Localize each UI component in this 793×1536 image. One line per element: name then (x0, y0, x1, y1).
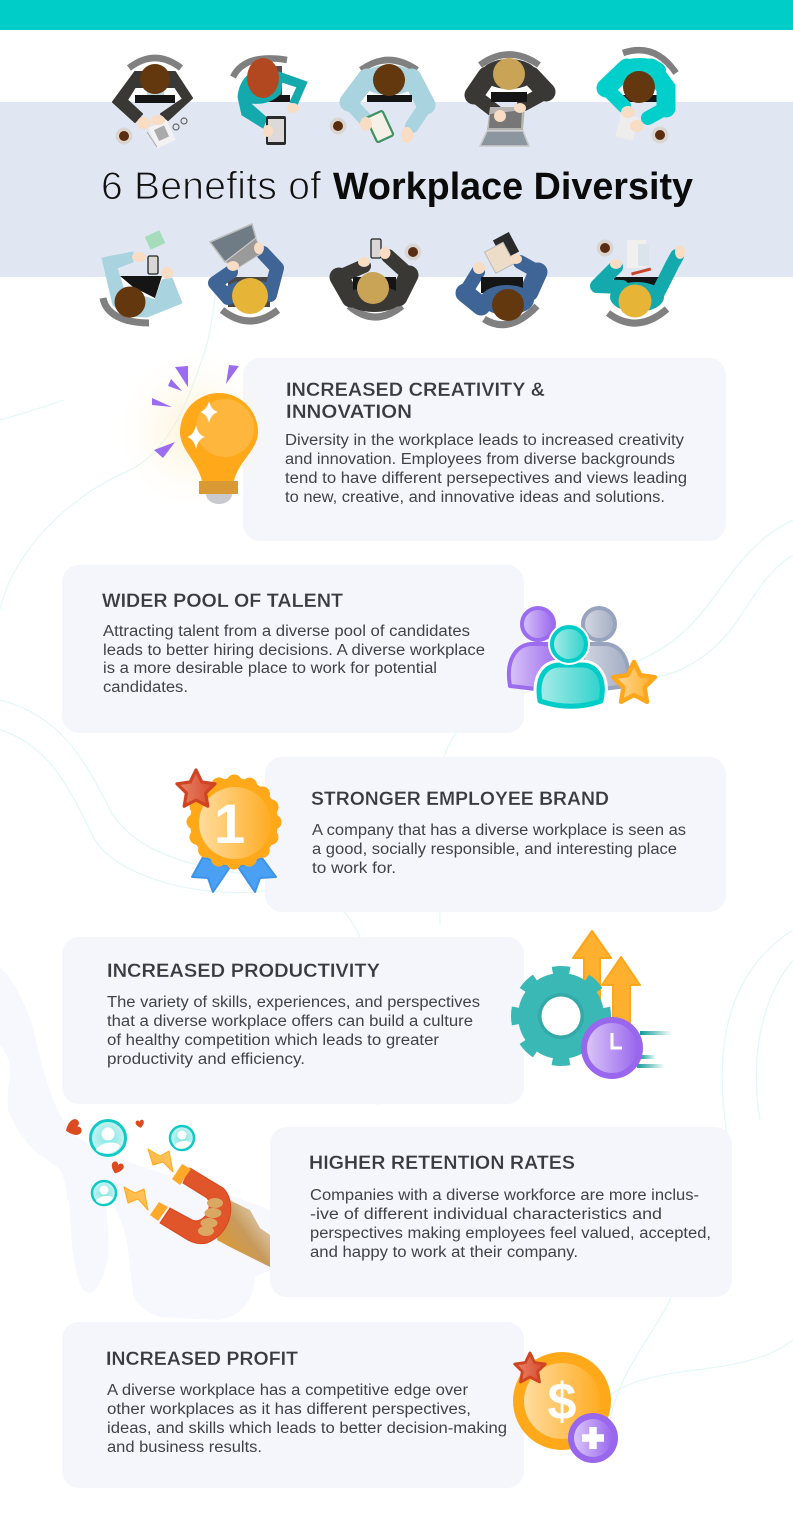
body text: other workplaces as it has different perspectives, (107, 1401, 471, 1418)
person 1 top row (113, 58, 192, 148)
icon: gear, arrows and clock (516, 931, 672, 1079)
heading: WIDER POOL OF TALENT (102, 591, 343, 612)
heading: HIGHER RETENTION RATES (309, 1153, 575, 1174)
panel: higher retention rates (270, 1127, 732, 1297)
panel: increased productivity (62, 937, 524, 1104)
heading (286, 380, 545, 423)
body text: Diversity in the workplace leads to increased creativity (285, 432, 684, 449)
body text: A diverse workplace has a competitive edge over (107, 1382, 468, 1399)
icon: medal: 1 (214, 792, 245, 855)
person 3 top row (330, 60, 426, 143)
body text: tend to have different persepectives and views leading (285, 470, 687, 487)
heading: INCREASED CREATIVITY & (286, 380, 545, 401)
body text (310, 1187, 711, 1261)
panel: wider pool of talent (62, 565, 524, 733)
body text (107, 994, 480, 1068)
body text: that a diverse workplace offers can build a culture (107, 1013, 473, 1030)
heading: INCREASED PRODUCTIVITY (107, 961, 380, 982)
person 8 bottom row (339, 239, 422, 317)
body text: perspectives making employees feel valued, accepted, (310, 1225, 711, 1242)
heading: INCREASED PROFIT (106, 1349, 298, 1370)
body text: a good, socially responsible, and interesting place (312, 841, 677, 858)
body text (103, 623, 485, 696)
icon: light bulb (117, 352, 273, 508)
icon: coin with plus: $ (548, 1373, 577, 1431)
body text: A company that has a diverse workplace is seen as (312, 822, 686, 839)
title: Workplace Diversity (333, 166, 693, 208)
icon: team with star (509, 608, 655, 706)
person 2 top row (233, 58, 307, 145)
panel: increased creativity and innovation (243, 358, 726, 541)
heading: STRONGER EMPLOYEE BRAND (311, 789, 609, 810)
person 6 bottom row (102, 230, 182, 323)
body text (312, 822, 686, 877)
person 9 bottom row (465, 232, 538, 325)
title background band (0, 102, 793, 277)
body text: ideas, and skills which leads to better decision-making (107, 1420, 507, 1437)
body text: and business results. (107, 1439, 262, 1456)
person 10 bottom row (596, 240, 685, 323)
body text (107, 1382, 507, 1456)
panel: stronger employee brand (265, 757, 726, 912)
body text: and happy to work at their company. (310, 1244, 578, 1261)
body text: to work for. (312, 860, 396, 877)
body text: of healthy competition which leads to greater (107, 1032, 439, 1049)
body text: to new, creative, and innovative ideas and solutions. (285, 489, 665, 506)
body text: Attracting talent from a diverse pool of candidates (103, 623, 470, 640)
body text: candidates. (103, 679, 188, 696)
person 5 top row (606, 50, 676, 144)
panel: increased profit (62, 1322, 524, 1488)
heading: INNOVATION (286, 402, 412, 423)
body text: leads to better hiring decisions. A diverse workplace (103, 642, 485, 659)
person 4 top row (474, 54, 546, 146)
body text: is a more desirable place to work for potential (103, 660, 437, 677)
title: 6 Benefits of (101, 165, 321, 208)
body text: and innovation. Employees from diverse backgrounds (285, 451, 675, 468)
icon: medal (177, 770, 278, 892)
title (101, 165, 693, 208)
body text: The variety of skills, experiences, and perspectives (107, 994, 480, 1011)
body text (285, 432, 687, 506)
body text: Companies with a diverse workforce are more inclus- (310, 1187, 699, 1204)
person 7 bottom row (210, 224, 278, 321)
top teal band (0, 0, 793, 30)
body text: productivity and efficiency. (107, 1051, 305, 1068)
icon: magnet attracting people (63, 1118, 270, 1267)
body text: -ive of different individual characteristics and (310, 1206, 662, 1223)
icon: coin with plus (513, 1352, 618, 1463)
